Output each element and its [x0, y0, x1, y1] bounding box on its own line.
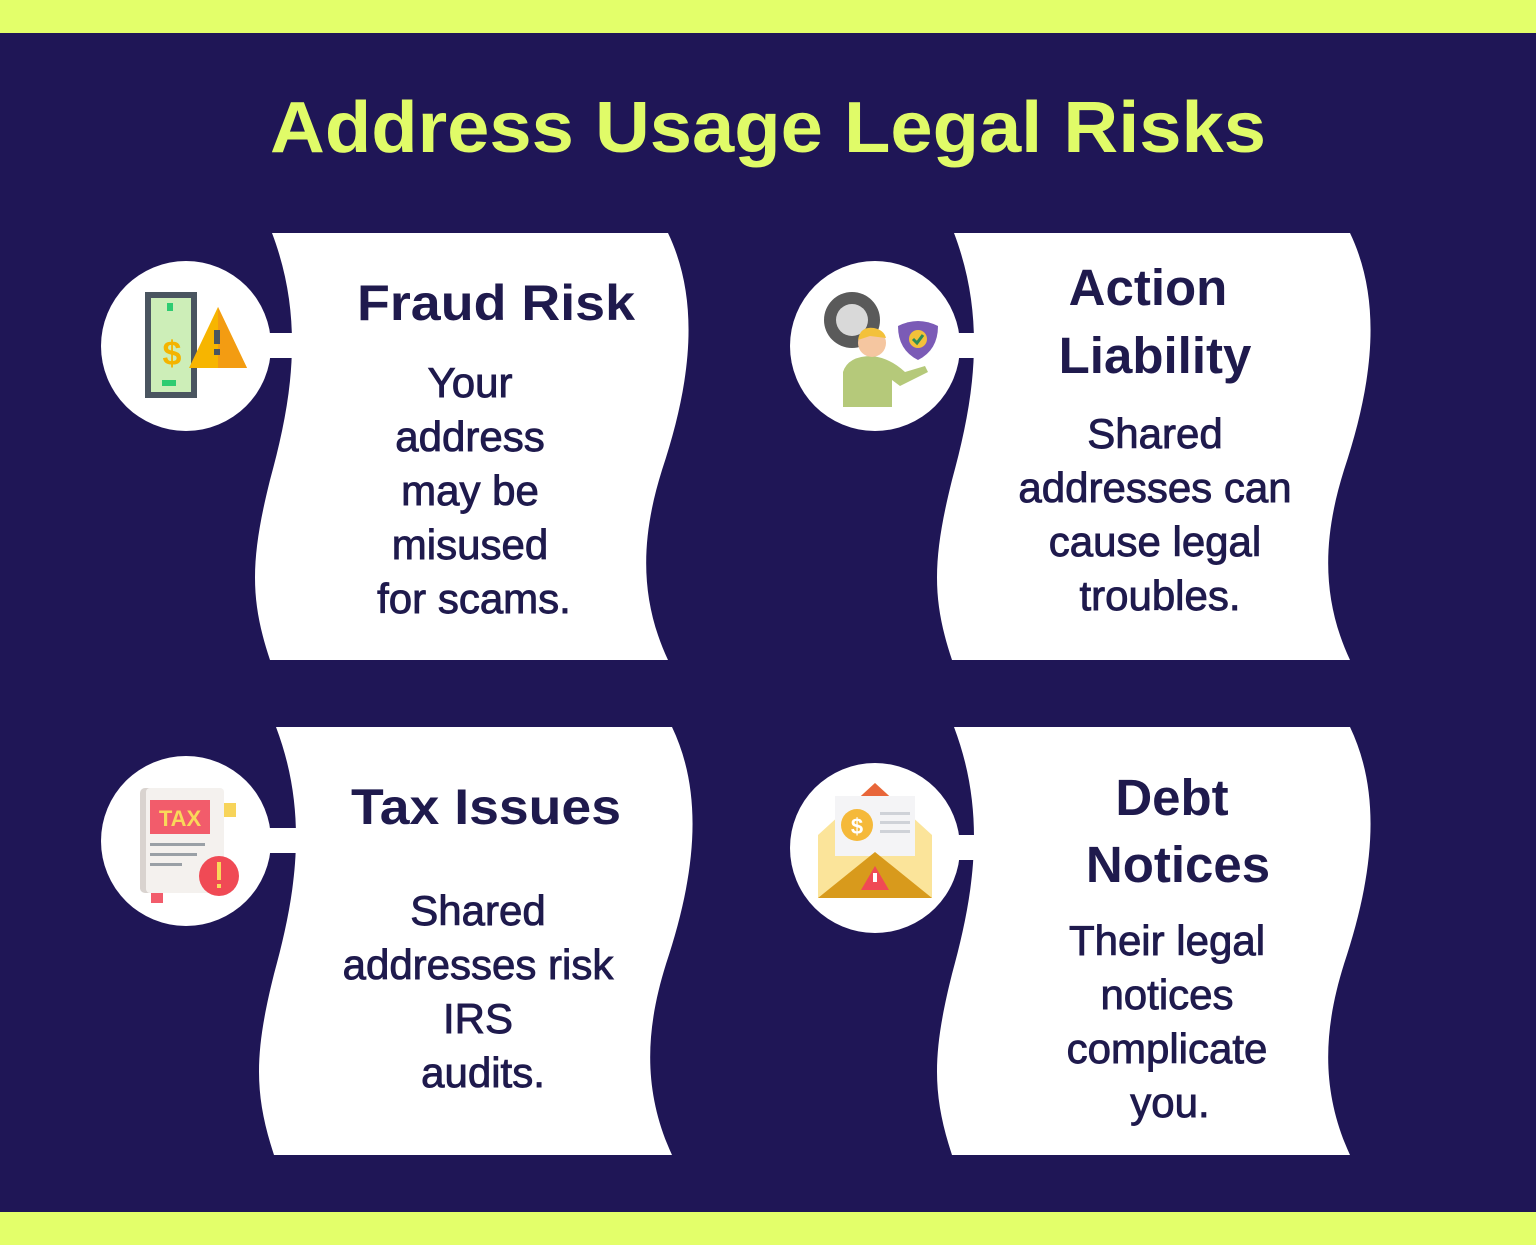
panel: fraud risk — [101, 233, 689, 660]
panel: debt notices — [790, 727, 1371, 1155]
heading: Tax Issues — [351, 779, 621, 835]
body text: notices — [1100, 971, 1234, 1018]
body text: Shared — [1087, 410, 1223, 457]
body text: complicate — [1067, 1025, 1267, 1072]
body text: troubles. — [1079, 572, 1241, 619]
panel: action liability — [790, 233, 1371, 660]
icon: money warning — [145, 292, 247, 398]
icon: money warning: $ — [163, 335, 182, 373]
body text: Their legal — [1069, 917, 1265, 964]
body text: you. — [1130, 1079, 1210, 1126]
heading: Notices — [1086, 836, 1270, 893]
heading: Fraud Risk — [357, 275, 635, 331]
icon: envelope with notice: $ — [851, 814, 863, 839]
body text: may be — [401, 467, 539, 514]
body text: audits. — [421, 1049, 545, 1096]
body text: for scams. — [377, 575, 571, 622]
icon: person with gear and shield — [824, 292, 938, 407]
heading: Debt — [1115, 769, 1229, 826]
icon: envelope with notice — [818, 783, 932, 898]
title: Address Usage Legal Risks — [270, 88, 1266, 168]
body text: Shared — [410, 887, 546, 934]
body text: Your — [428, 359, 512, 406]
panel: tax issues — [101, 727, 693, 1155]
body text: address — [395, 413, 545, 460]
body text: cause legal — [1049, 518, 1261, 565]
icon: tax document: TAX — [159, 806, 202, 831]
body text: addresses risk — [343, 941, 614, 988]
heading: Action — [1069, 259, 1227, 316]
body text: misused — [392, 521, 548, 568]
body text: IRS — [443, 995, 513, 1042]
heading: Liability — [1059, 327, 1252, 384]
body text: addresses can — [1018, 464, 1292, 511]
icon: tax document — [140, 788, 239, 903]
